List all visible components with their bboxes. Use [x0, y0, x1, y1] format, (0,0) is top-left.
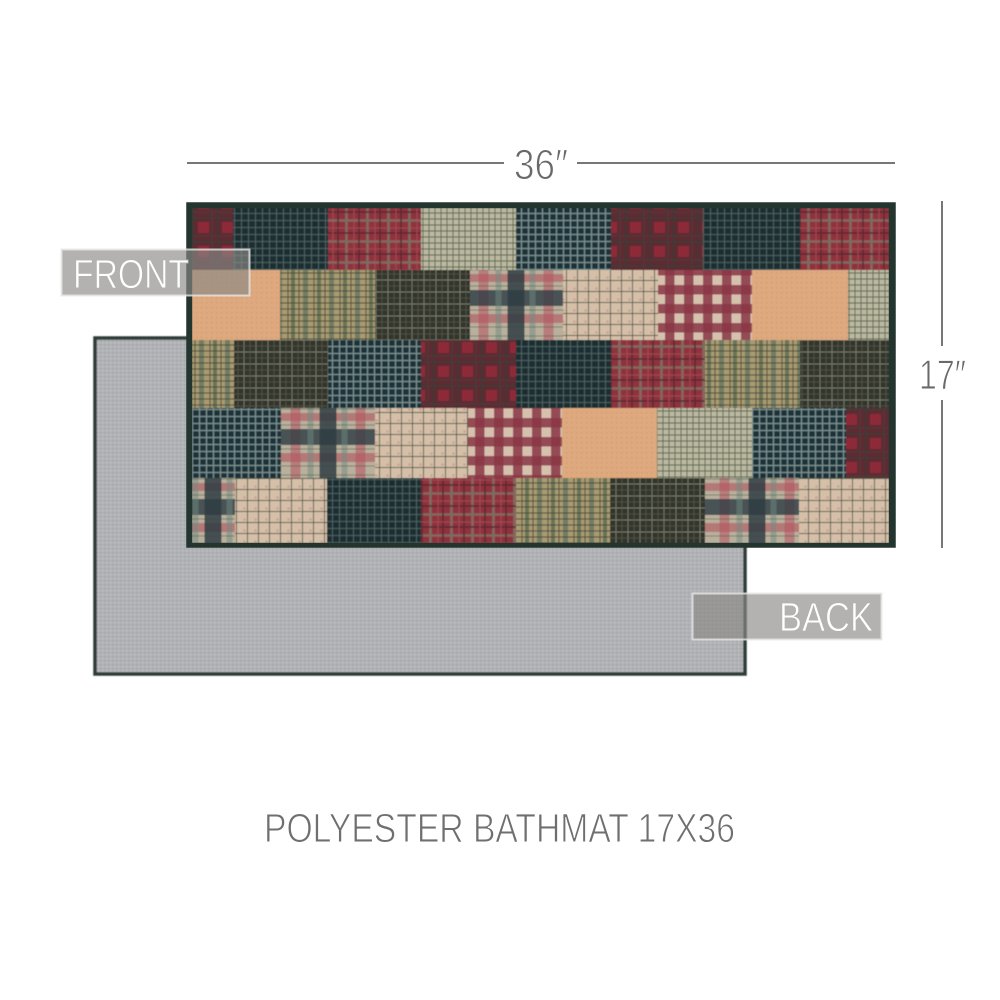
label: FRONT: FRONT — [73, 251, 189, 297]
label: BACK: BACK — [779, 594, 873, 640]
label: BACK — [692, 594, 882, 640]
front of bathmat: patchwork — [188, 204, 894, 546]
height dimension: 17 inches: 17″ — [919, 351, 966, 398]
product title: POLYESTER BATHMAT 17X36 — [264, 805, 735, 851]
back of bathmat — [95, 338, 745, 674]
patchwork patches — [192, 208, 889, 543]
width dimension: 36 inches: 36″ — [514, 141, 568, 189]
